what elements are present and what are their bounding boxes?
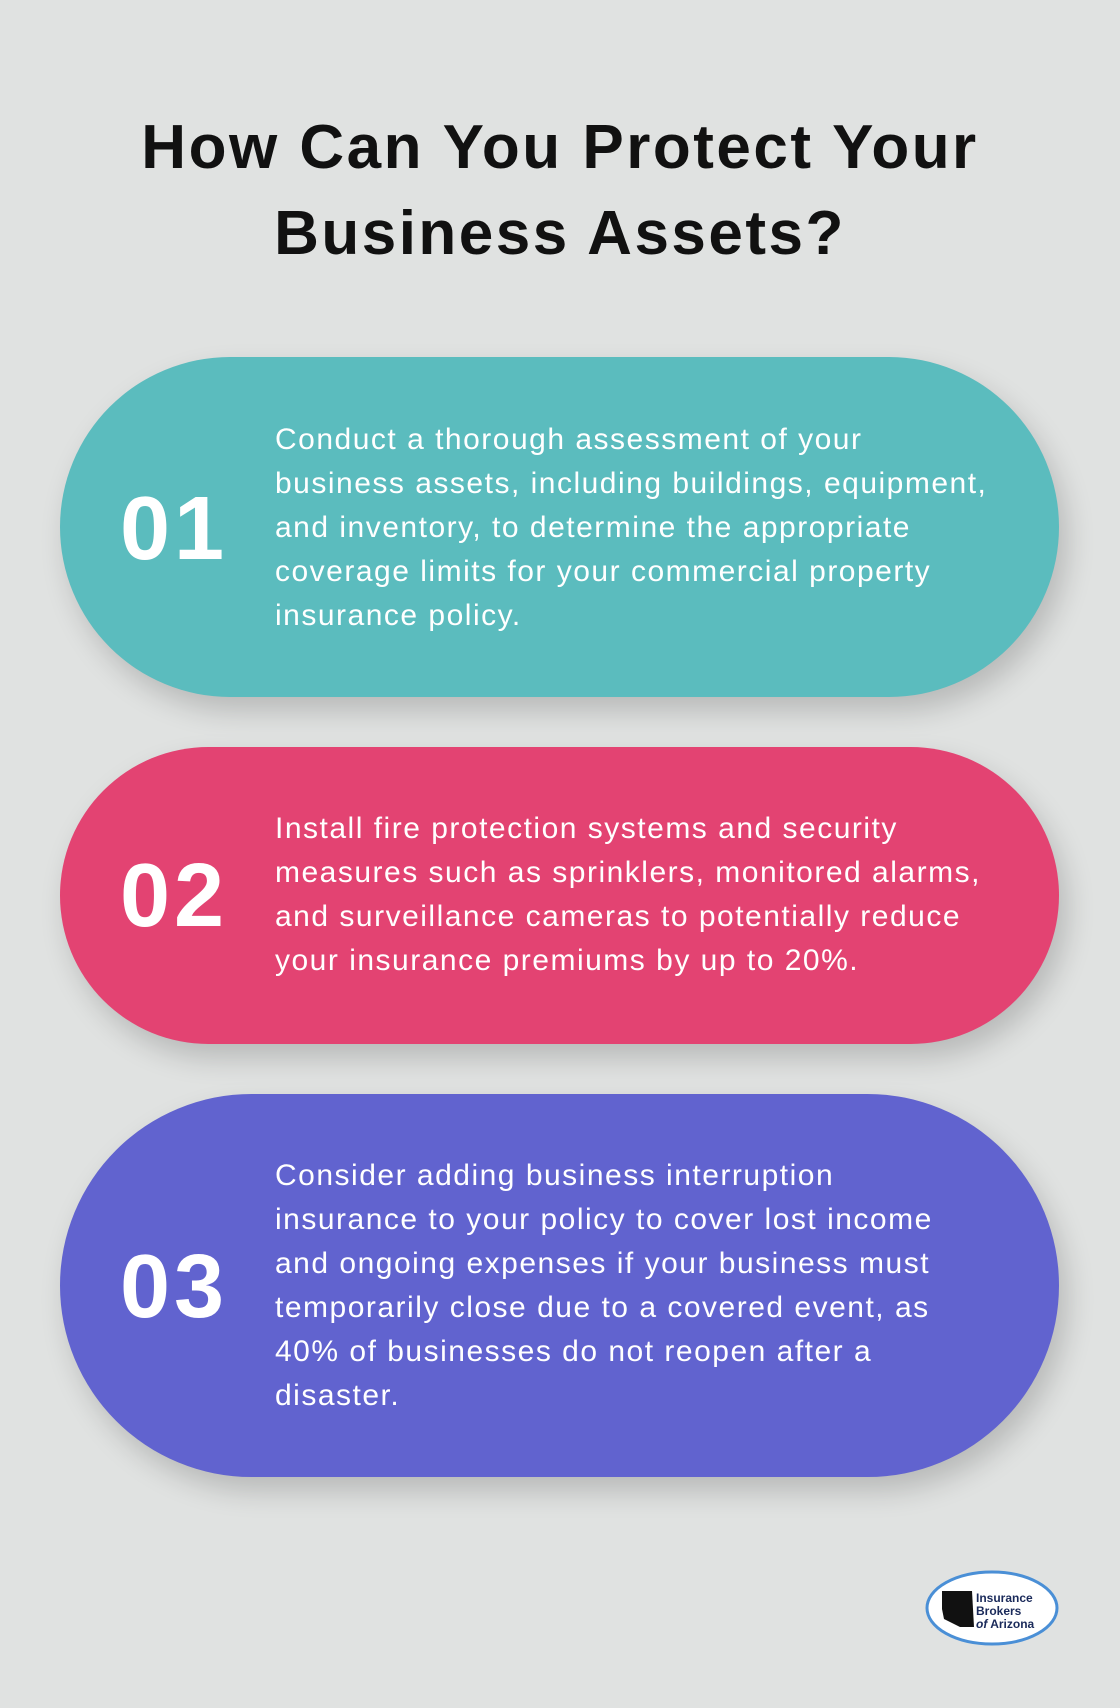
number 03: 03 (120, 1237, 228, 1337)
logo (926, 1570, 1058, 1646)
text block 03: insurance to your policy to cover lost income (275, 1203, 933, 1236)
text block 03: 40% of businesses do not reopen after a (275, 1335, 872, 1368)
title: Business Assets? (274, 199, 846, 268)
text block 02: your insurance premiums by up to 20%. (275, 944, 859, 977)
title: How Can You Protect Your (141, 113, 979, 182)
text block 03: disaster. (275, 1379, 400, 1412)
logo: Brokers (976, 1604, 1022, 1618)
title (141, 113, 979, 268)
text block 02: Install fire protection systems and security (275, 812, 898, 845)
text block 03: and ongoing expenses if your business must (275, 1247, 930, 1280)
text block 03: Consider adding business interruption (275, 1159, 834, 1192)
text block 01: coverage limits for your commercial property (275, 555, 931, 588)
text block 03: temporarily close due to a covered event, as (275, 1291, 930, 1324)
text block 01: insurance policy. (275, 599, 522, 632)
text block 02 (275, 812, 981, 977)
text block 01 (275, 423, 987, 632)
text block 01: Conduct a thorough assessment of your (275, 423, 862, 456)
number 02: 02 (120, 846, 228, 946)
text block 01: business assets, including buildings, equipment, (275, 467, 987, 500)
panel: step 01 (60, 357, 1059, 697)
panel: step 03 (60, 1094, 1059, 1477)
text block 02: and surveillance cameras to potentially reduce (275, 900, 961, 933)
panel: step 02 (60, 747, 1059, 1044)
text block 02: measures such as sprinklers, monitored alarms, (275, 856, 981, 889)
logo: of Arizona (976, 1617, 1035, 1631)
logo: Insurance (976, 1591, 1033, 1605)
text block 03 (275, 1159, 933, 1412)
number 01: 01 (120, 479, 228, 579)
text block 01: and inventory, to determine the appropriate (275, 511, 911, 544)
